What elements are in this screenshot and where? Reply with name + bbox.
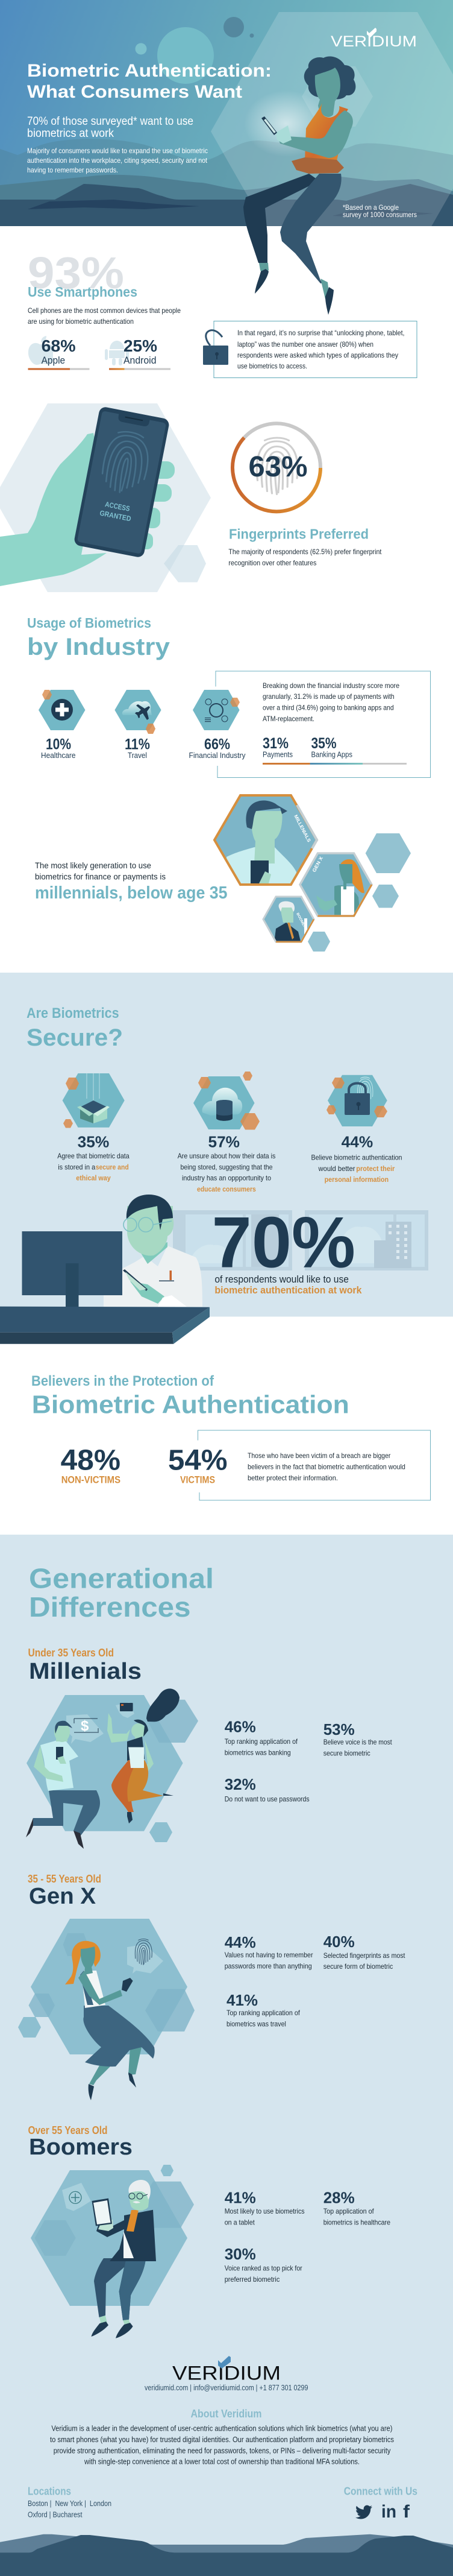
panel: generational differences [0, 1535, 453, 2576]
footnote: *Based on a Google [343, 203, 399, 212]
panel: use smartphones [28, 248, 417, 377]
about text: with single-step convenience at a lower total cost of ownership than traditional MFA solutions. [84, 2457, 360, 2466]
heading [29, 1562, 214, 1623]
callout text: over a third (34.6%) going to banking apps and [263, 704, 394, 712]
stat: 32%: 32% [225, 1775, 256, 1793]
stat: 30% [225, 2245, 302, 2284]
panel: millennials most likely [35, 795, 411, 952]
about text: provide strong authentication, eliminating the need for passwords, tokens, or PINs – delivering multi-factor security [54, 2446, 391, 2455]
stat: financial [189, 736, 246, 760]
stat: healthcare: 10% [46, 736, 71, 753]
stat: 44% [311, 1133, 402, 1184]
callout text: granularly, 31.2% is made up of payments with [263, 692, 395, 701]
stat: apple 68%: Apple [42, 355, 65, 366]
stat: 41% tablet: on a tablet [225, 2218, 255, 2227]
stat: 41% travel: Top ranking application of [226, 2009, 300, 2017]
stat: 70% at work: biometric authentication at work [214, 1284, 362, 1296]
heading: gen x: Gen X [29, 1884, 96, 1909]
callout text: better protect their information. [248, 1474, 338, 1482]
heading: millennials [28, 1647, 142, 1684]
stat: healthcare [41, 736, 76, 760]
stat: banking apps: 35% [311, 735, 336, 752]
stat: apple 68% [42, 336, 76, 366]
stat: 32%: Do not want to use passwords [225, 1795, 310, 1803]
stat: banking apps [311, 735, 352, 759]
illustration: woman with phone [243, 56, 355, 315]
highlight text: millennials, below age 35 [35, 883, 228, 903]
heading: Usage of Biometrics [27, 615, 151, 631]
stat: android 25% [123, 336, 157, 366]
hexagon overlay [211, 12, 453, 251]
icon: open padlock [203, 330, 228, 365]
heading: Secure? [27, 1024, 123, 1051]
stat: 41% travel: biometrics was travel [226, 2020, 286, 2028]
callout text [263, 681, 399, 723]
stat: travel [125, 736, 150, 760]
description: recognition over other features [228, 559, 316, 567]
donut chart 63% [233, 423, 320, 511]
connect with us: Connect with Us [344, 2486, 417, 2498]
figure: man in suit [92, 2180, 156, 2338]
decorative hexagons [308, 833, 411, 952]
heading: boomers: Boomers [29, 2135, 133, 2160]
heading: Biometric Authentication [32, 1391, 349, 1419]
illustration: office windows [173, 1210, 428, 1271]
stat: 28%: Top application of [323, 2207, 374, 2215]
heading: gen x: 35 - 55 Years Old [28, 1873, 101, 1885]
title: Biometric Authentication: [27, 61, 272, 81]
icon: cloud storage [193, 1072, 260, 1130]
stat: 35%: is stored in a [58, 1163, 95, 1171]
stat: 53%: 53% [323, 1720, 355, 1738]
stat: travel: 11% [125, 736, 150, 753]
stat: 40%: 40% [323, 1933, 355, 1951]
stat: 30%: preferred biometric [225, 2275, 280, 2284]
access granted label: GRANTED [99, 509, 132, 523]
stat: 46%: 46% [225, 1718, 256, 1736]
contact line: veridiumid.com | info@veridiumid.com | +1 877 301 0299 [145, 2383, 308, 2392]
stat: 28% [323, 2189, 390, 2227]
figure: woman in skirt [65, 1941, 155, 2100]
stat: 46%: biometrics was banking [225, 1749, 291, 1757]
panel: usage by industry [27, 615, 430, 778]
icon: apple [28, 336, 53, 365]
callout text: Breaking down the financial industry score more [263, 681, 399, 690]
stat: 28%: 28% [323, 2189, 355, 2207]
stat: 57%: being stored, suggesting that the [181, 1163, 273, 1171]
text [35, 860, 166, 882]
about text: Veridium is a leader in the development of user-centric authentication solutions which link biometrics (what you are) [51, 2424, 392, 2433]
access granted label [99, 499, 134, 523]
hexagon: millennial portrait [214, 795, 317, 886]
stat: 44% values: Values not having to remember [225, 1951, 313, 1959]
label: MILLENIALS [293, 814, 312, 844]
description: Cell phones are the most common devices that people [28, 306, 181, 315]
logo: VERIDIUM [331, 33, 417, 50]
locations: Oxford | Bucharest [28, 2510, 83, 2519]
locations [28, 2486, 111, 2519]
stat: 40%: Selected fingerprints as most [323, 1951, 405, 1960]
heading: millennials: Under 35 Years Old [28, 1647, 114, 1659]
stat: 44% values [225, 1933, 313, 1970]
hexagon: gen x portrait [300, 853, 372, 917]
footer mountains [0, 2534, 453, 2576]
icon: stored box [63, 1073, 125, 1128]
stat: victims: VICTIMS [180, 1474, 215, 1486]
callout text: believers in the fact that biometric authentication would [248, 1463, 405, 1471]
stat: travel: Travel [128, 751, 147, 760]
phone [73, 406, 170, 558]
stat: 44% values: passwords more than anything [225, 1962, 312, 1970]
text: biometrics for finance or payments is [35, 872, 166, 882]
callout text: ATM-replacement. [263, 715, 314, 723]
icon: facebook: f [403, 2502, 410, 2522]
icon: android [105, 341, 129, 365]
intro text [27, 147, 208, 174]
desk [0, 1307, 210, 1344]
panel: believers in protection [31, 1373, 430, 1500]
heading: gen x [28, 1873, 101, 1909]
panel: are biometrics secure [0, 973, 453, 1344]
footer logo [172, 2356, 281, 2384]
text: The most likely generation to use [35, 860, 151, 870]
fingerprint [99, 428, 153, 497]
stat: victims: 54% [168, 1445, 228, 1477]
stat: 41% travel: 41% [226, 1991, 258, 2009]
intro text: having to remember passwords. [27, 166, 118, 174]
stat: financial: Financial Industry [189, 751, 246, 760]
stat: 41% tablet: Most likely to use biometrics [225, 2207, 305, 2215]
stacked bar [263, 763, 407, 765]
stat: 44%: protect their [356, 1164, 395, 1173]
stat: non-victims: NON-VICTIMS [61, 1474, 120, 1486]
big stat 93%: 93% [28, 248, 124, 298]
speech bubble: health [62, 2183, 91, 2211]
description [28, 306, 181, 326]
stat: 40% [323, 1933, 405, 1971]
callout: financial breakdown [216, 671, 430, 778]
icon: linkedin: in [381, 2502, 396, 2522]
stat: 57%: Are unsure about how their data is [178, 1152, 275, 1160]
stat: 57%: industry has an oppportunity to [182, 1174, 271, 1182]
heading: Fingerprints Preferred [229, 526, 369, 542]
stat: payments: 31% [263, 735, 289, 752]
speech bubble: dollar: $ [81, 1718, 89, 1734]
stat: 40%: secure form of biometric [323, 1962, 393, 1971]
heading [31, 1373, 349, 1419]
heading: boomers [28, 2124, 133, 2160]
speech bubble: fingerprint [127, 1939, 163, 1974]
heading [27, 615, 170, 660]
hexagon: boomer portrait [263, 897, 314, 944]
locations: Boston | New York | London [28, 2499, 111, 2508]
stat: 46% [225, 1718, 298, 1757]
stat: 35% [57, 1133, 130, 1182]
about text [50, 2424, 394, 2466]
heading: boomers: Over 55 Years Old [28, 2124, 107, 2136]
stat: 53%: Believe voice is the most [323, 1738, 392, 1746]
stat: 57% [178, 1133, 275, 1193]
illustration: hand holding phone [0, 403, 211, 592]
callout text: laptop” was the number one answer (80%) when [237, 340, 373, 349]
stat: 57%: 57% [208, 1133, 240, 1151]
stat: 53% [323, 1720, 392, 1758]
stat: 57%: educate consumers [197, 1185, 256, 1193]
stat: 44%: 44% [342, 1133, 373, 1151]
icon: travel [114, 690, 161, 734]
bar: android [109, 368, 170, 370]
heading: millennials: Millenials [29, 1659, 142, 1684]
footer logo: VERIDIUM [172, 2363, 281, 2384]
locations: Locations [28, 2486, 71, 2498]
connect with us [344, 2486, 417, 2522]
subtitle: biometrics at work [27, 127, 114, 140]
stat: 30%: 30% [225, 2245, 256, 2263]
label: BOOMERS [295, 912, 308, 931]
intro text: Majority of consumers would like to expand the use of biometric [27, 147, 208, 155]
subtitle [27, 115, 193, 140]
stat: 44%: Believe biometric authentication [311, 1153, 402, 1161]
illustration: man at desk [0, 1195, 210, 1344]
illustration: gen x [18, 1919, 195, 2100]
speech bubble: card [116, 1702, 134, 1718]
callout text: In that regard, it’s no surprise that “unlocking phone, tablet, [237, 329, 405, 337]
stat: 44% values: 44% [225, 1933, 256, 1951]
monitor [22, 1231, 122, 1313]
intro text: authentication into the workplace, citing speed, security and not [27, 156, 208, 165]
stat: non-victims: 48% [61, 1445, 120, 1477]
stat: 53%: secure biometric [323, 1749, 370, 1758]
footnote [343, 203, 417, 219]
description [228, 548, 382, 567]
stat: financial: 66% [204, 736, 230, 753]
stat: 41% tablet: 41% [225, 2189, 256, 2207]
icon: financial [193, 690, 240, 730]
stat: apple 68%: 68% [42, 336, 76, 355]
logo [331, 28, 417, 50]
heading: Use Smartphones [28, 284, 137, 300]
callout: victims [168, 1430, 430, 1500]
stat: 28%: biometrics is healthcare [323, 2218, 390, 2227]
callout text [248, 1451, 405, 1482]
stat: banking apps: Banking Apps [311, 750, 352, 759]
callout text: use biometrics to access. [237, 362, 307, 370]
callout text [237, 329, 405, 370]
heading: by Industry [27, 634, 170, 660]
about heading: About Veridium [190, 2408, 261, 2420]
stat: 30%: Voice ranked as top pick for [225, 2264, 302, 2273]
callout text: respondents were asked which types of applications they [237, 351, 398, 359]
stat: android 25%: Android [123, 355, 157, 366]
callout: unlocking [203, 321, 417, 377]
heading: Differences [29, 1591, 190, 1623]
description: are using for biometric authentication [28, 317, 134, 326]
callout text: Those who have been victim of a breach are bigger [248, 1451, 390, 1460]
icon: padlock with fingerprint [326, 1075, 387, 1126]
illustration: millennials [26, 1688, 198, 1849]
heading: Are Biometrics [27, 1005, 119, 1021]
donut chart 63%: 63% [248, 451, 307, 483]
heading [27, 1005, 123, 1051]
illustration: boomers [31, 2165, 194, 2338]
about text: to smart phones (what you have) for trusted digital identities. Our authentication platform and proprietary biometrics [50, 2435, 394, 2444]
speech bubble: dollar [66, 1714, 104, 1744]
stat: 70% at work: 70% [212, 1202, 355, 1283]
figure: woman [107, 1688, 180, 1823]
icon: twitter [355, 2505, 372, 2519]
stat: 35%: 35% [78, 1133, 109, 1151]
stat: healthcare: Healthcare [41, 751, 76, 760]
stat: android 25%: 25% [123, 336, 157, 355]
panel: fingerprints preferred [228, 423, 382, 567]
stat: 44%: would better [318, 1164, 355, 1173]
icon: healthcare [39, 690, 86, 730]
footnote: survey of 1000 consumers [343, 210, 417, 219]
stat: 70% at work: of respondents would like to use [214, 1274, 349, 1285]
stat: 41% tablet [225, 2189, 305, 2227]
stat: 46%: Top ranking application of [225, 1737, 298, 1746]
figure: man [26, 1721, 100, 1849]
stat: 41% travel [226, 1991, 300, 2028]
stat: 44%: personal information [325, 1175, 389, 1184]
bar: apple [28, 368, 89, 370]
stat: 35%: secure and [96, 1163, 129, 1171]
heading: Believers in the Protection of [31, 1373, 214, 1389]
access granted label: ACCESS [104, 500, 131, 513]
label: GEN X [311, 855, 324, 873]
stat: 35%: ethical way [76, 1174, 111, 1182]
stat: payments: Payments [263, 750, 293, 759]
description: The majority of respondents (62.5%) prefer fingerprint [228, 548, 382, 556]
title [27, 61, 272, 102]
subtitle: 70% of those surveyed* want to use [27, 115, 193, 128]
title: What Consumers Want [27, 82, 242, 102]
stat: 32% [225, 1775, 310, 1803]
heading: Generational [29, 1562, 214, 1594]
panel: hero [0, 0, 453, 251]
stat: 35%: Agree that biometric data [57, 1152, 130, 1160]
